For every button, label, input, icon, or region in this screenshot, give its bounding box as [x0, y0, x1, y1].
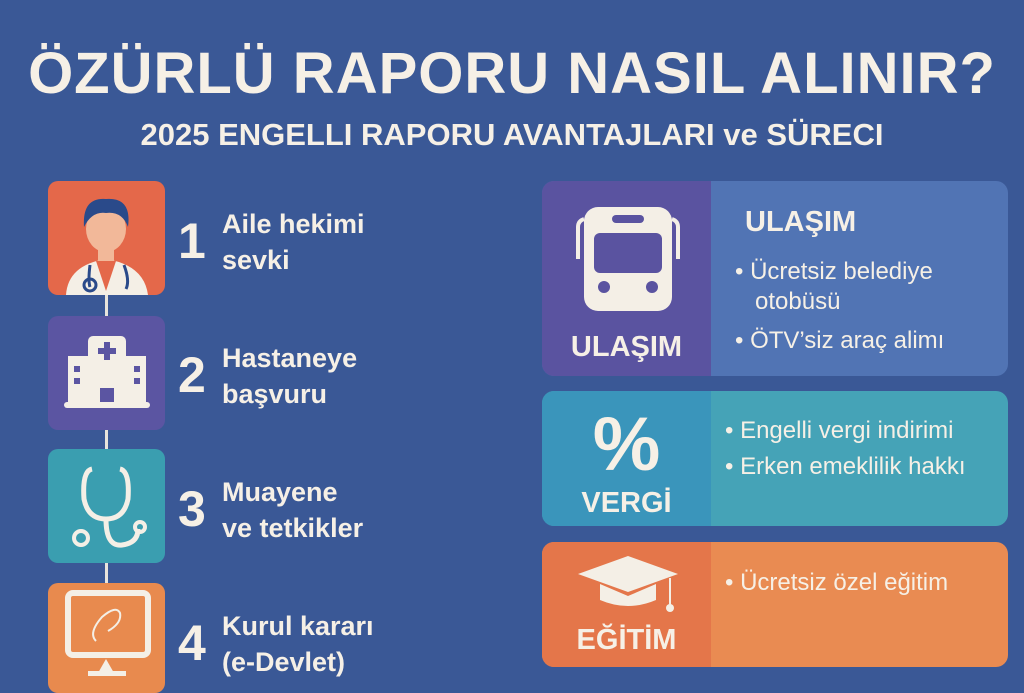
icon: bus	[576, 207, 680, 311]
step 3 text: 3	[178, 481, 206, 537]
text: Hastaneye	[222, 343, 357, 373]
text: Muayene	[222, 477, 338, 507]
panel: ulaşım: ULAŞIM	[571, 331, 682, 363]
step 4 icon: monitor	[48, 583, 165, 693]
connector line	[105, 290, 108, 590]
panel: eğitim: • Ücretsiz özel eğitim	[725, 569, 948, 596]
text: başvuru	[222, 379, 327, 409]
panel: ulaşım	[542, 181, 1008, 376]
panel: ulaşım: • Ücretsiz belediye	[735, 258, 933, 285]
step 3 icon: stethoscope	[48, 449, 165, 563]
title: ÖZÜRLÜ RAPORU NASIL ALINIR?	[28, 41, 996, 106]
panel: vergi: • Erken emeklilik hakkı	[725, 453, 965, 480]
step 4 text: 4	[178, 615, 206, 671]
text: Kurul kararı	[222, 611, 374, 641]
panel: ulaşım: • ÖTV’siz araç alimı	[735, 327, 944, 354]
panel: vergi	[542, 391, 1008, 526]
icon: graduation cap	[578, 556, 678, 612]
text: ve tetkikler	[222, 513, 363, 543]
panel: vergi: • Engelli vergi indirimi	[725, 417, 953, 444]
step 1 icon: doctor	[48, 181, 165, 295]
text: sevki	[222, 245, 290, 275]
panel: eğitim: EĞİTİM	[577, 624, 676, 656]
text: (e-Devlet)	[222, 647, 345, 677]
step 2 icon: hospital	[48, 316, 165, 430]
icon: percent: %	[593, 402, 660, 487]
step 1 text: 1	[178, 213, 206, 269]
subtitle: 2025 ENGELLI RAPORU AVANTAJLARI ve SÜRECI	[140, 117, 884, 152]
panel: ulaşım: otobüsü	[755, 288, 840, 315]
text: Aile hekimi	[222, 209, 365, 239]
panel: vergi: VERGİ	[581, 487, 672, 519]
panel: eğitim	[542, 542, 1008, 667]
panel: ulaşım: ULAŞIM	[745, 206, 856, 238]
step 2 text: 2	[178, 347, 206, 403]
